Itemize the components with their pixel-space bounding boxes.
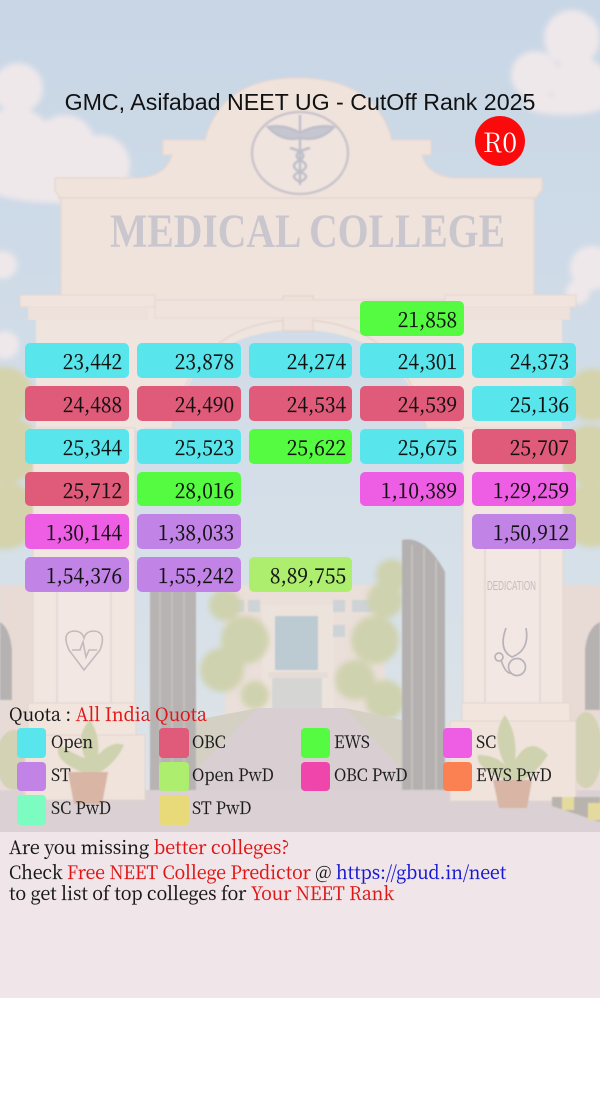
legend: ST PwD [159,794,251,825]
iron gates [150,539,445,790]
pillar lettering: DEDICATION [487,578,536,593]
rank cell: 23,442 [63,345,122,375]
legend: SC [443,728,496,758]
badge: round R0 [475,116,525,166]
legend: Open [17,728,92,758]
rank cell: 1,55,242 [158,559,234,589]
legend: OBC: OBC [192,728,226,753]
kerb [552,797,600,822]
rank cell: 25,712 [63,474,122,504]
rank cell: 25,622 [287,431,346,461]
rank cell: 25,675 [398,431,458,461]
side wings [0,585,600,790]
legend: ST: ST [50,760,70,786]
footer panel [0,832,600,998]
rank cell [25,472,128,506]
rank cell: 1,29,259 [493,474,570,504]
rank cell: 24,539 [398,388,458,418]
rank cell [360,429,464,464]
courtyard trees [200,559,408,720]
footer question: Are you missing better colleges? [9,834,289,860]
rank cell: 8,89,755 [270,559,346,589]
rank cell [137,429,240,464]
legend: Open PwD [159,760,274,791]
legend: OBC PwD [301,760,408,791]
stethoscope icon [495,628,527,676]
legend: SC PwD [17,794,111,825]
rank cell: 24,301 [398,345,458,375]
side trees [0,367,600,549]
rank cell [25,343,128,378]
background illustration: medical college gate [0,0,600,832]
rank cell [360,301,464,336]
clouds [0,10,600,359]
footer predictor line: Check Free NEET College Predictor @ https://gbud.in/neet [9,859,506,885]
rank cell [472,386,576,420]
rank cell [25,557,128,592]
title: GMC, Asifabad NEET UG - CutOff Rank 2025 [65,89,535,115]
rank cell [137,557,240,592]
cutoff rank grid [25,301,576,592]
legend: OBC [159,728,226,758]
rank cell: 24,373 [510,345,570,375]
left pier [20,295,155,800]
rank cell [472,343,576,378]
rank cell [137,514,240,549]
rank cell: 24,534 [287,388,346,418]
heart icon [66,631,102,670]
legend: Open PwD: Open PwD [192,760,274,786]
rank cell [360,343,464,378]
rank cell [25,514,128,549]
legend: SC PwD: SC PwD [50,794,111,819]
rank cell: 28,016 [175,474,234,504]
rank cell [137,472,240,506]
gate arch [140,296,458,428]
rank cell [248,429,352,464]
legend: ST [17,760,70,791]
legend: OBC PwD: OBC PwD [334,760,408,786]
rank cell: 1,54,376 [46,559,122,589]
rank cell [25,386,128,420]
legend: EWS PwD [443,760,551,791]
potted plants [58,715,548,782]
legend: SC: SC [476,728,496,753]
rank cell [248,343,352,378]
legend: Open: Open [50,728,92,753]
badge: round R0: R0 [483,121,517,160]
right pier [445,295,576,801]
rank cell: 1,38,033 [158,516,234,546]
rank cell [137,386,240,420]
rank cell: 25,523 [175,431,234,461]
rank cell [360,472,464,506]
caduceus emblem [268,115,334,185]
legend: ST PwD: ST PwD [192,794,251,819]
rank cell [248,557,352,592]
rank cell: 24,488 [63,388,122,418]
rank cell: 23,878 [175,345,234,375]
legend [17,728,551,825]
rank cell: 24,490 [175,388,234,418]
legend: EWS [301,728,370,758]
rank cell: 25,707 [510,431,570,461]
upper facade [55,78,542,300]
rank cell [472,514,576,549]
footer rank line: to get list of top colleges for Your NEET Rank [9,880,394,906]
road and ground [150,708,402,832]
rank cell [472,472,576,506]
rank cell [472,429,576,464]
rank cell [137,343,240,378]
legend: EWS PwD: EWS PwD [476,760,551,786]
rank cell: 1,50,912 [493,516,570,546]
facade lettering: MEDICAL COLLEGE [110,205,505,258]
rank cell: 24,274 [287,345,346,375]
rank cell [248,386,352,420]
rank cell: 1,30,144 [46,516,122,546]
distant building [225,585,385,715]
rank cell [25,429,128,464]
rank cell: 25,136 [510,388,570,418]
quota heading: Quota : All India Quota [9,701,207,727]
rank cell [360,386,464,420]
rank cell: 1,10,389 [381,474,458,504]
rank cell: 21,858 [398,303,458,333]
legend: EWS: EWS [334,728,370,753]
rank cell: 25,344 [63,431,122,461]
